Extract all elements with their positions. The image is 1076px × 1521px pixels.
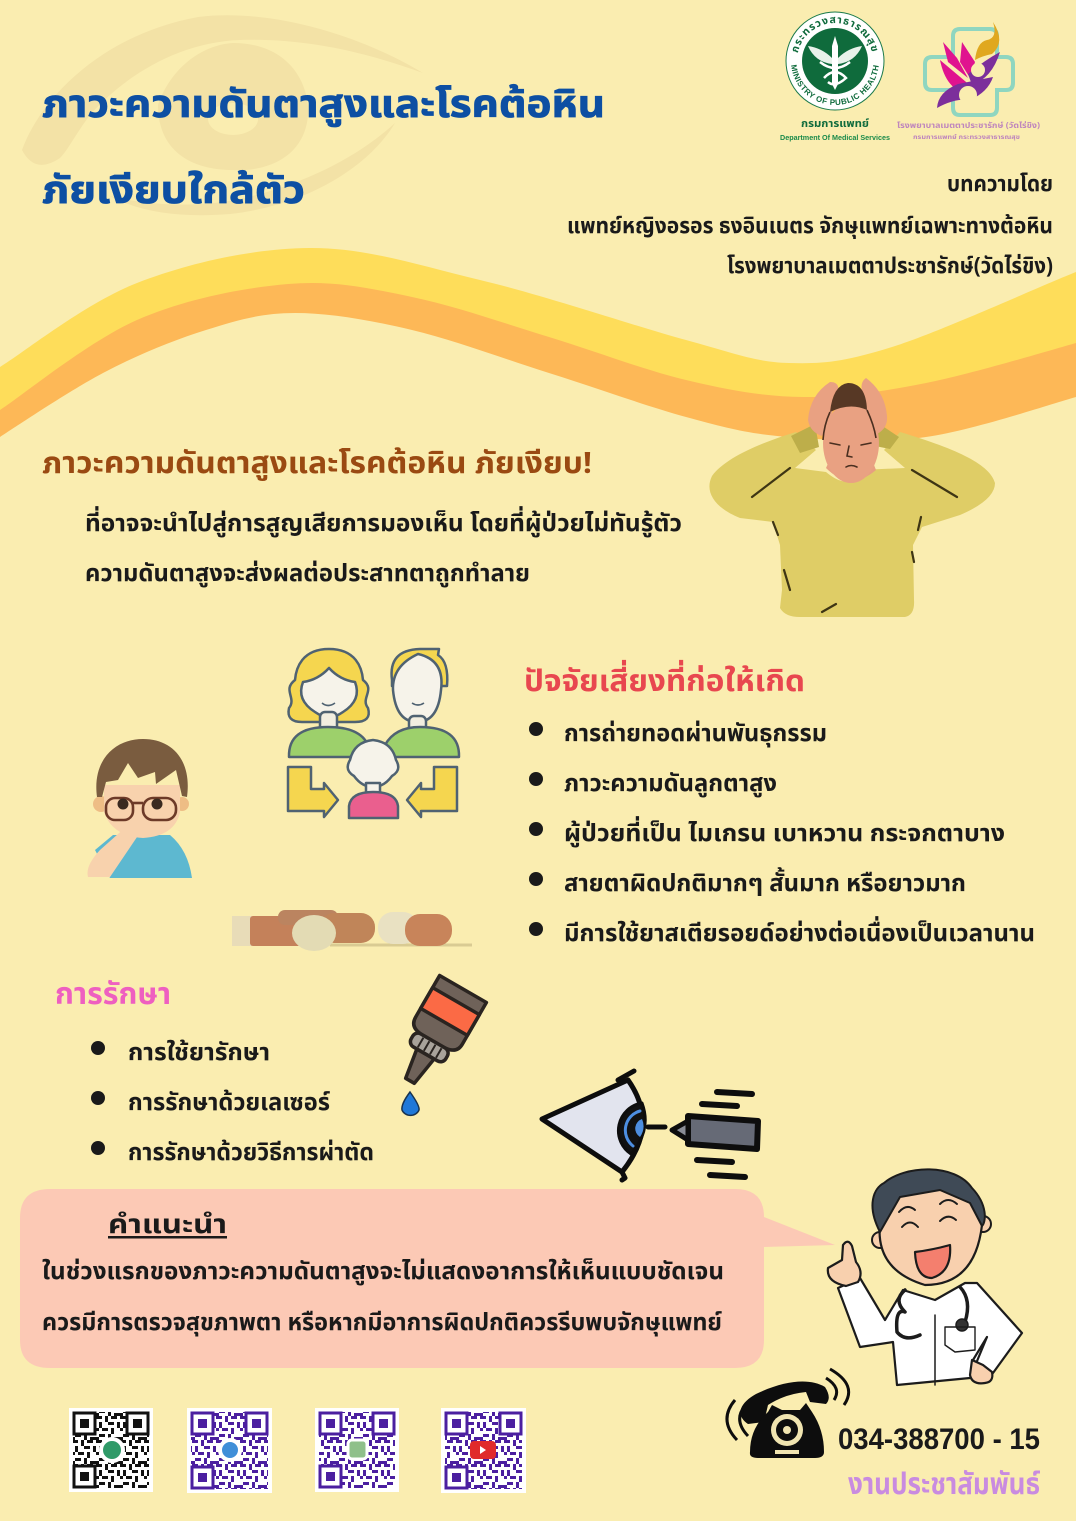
- risk factor list: [529, 716, 1035, 952]
- author credit: บทความโดย: [947, 168, 1053, 201]
- callout: advice: ในช่วงแรกของภาวะความดันตาสูงจะไม่แสดงอาการให้เห็นแบบชัดเจน: [42, 1254, 724, 1290]
- title: ภาวะความดันตาสูงและโรคต้อหิน: [42, 78, 605, 135]
- treatment list: การรักษาด้วยวิธีการผ่าตัด: [128, 1135, 374, 1171]
- QR code: LINE: [315, 1408, 399, 1492]
- logo: Ministry of Public Health: กรมการแพทย์: [801, 116, 869, 132]
- wave: orange band: [0, 283, 1076, 441]
- section heading: silent threat: ภาวะความดันตาสูงและโรคต้อหิน ภัยเงียบ!: [42, 441, 592, 487]
- intro text: [85, 506, 682, 592]
- heading: risk factors: ปัจจัยเสี่ยงที่ก่อให้เกิด: [524, 659, 805, 705]
- logo: Metta Pracharak hospital: โรงพยาบาลเมตตาประชารักษ์ (วัดไร่ขิง): [897, 119, 1040, 132]
- eye watermark background: [22, 15, 423, 215]
- illustration: doctor: [828, 1169, 1022, 1385]
- treatment list: การรักษาด้วยเลเซอร์: [128, 1085, 330, 1121]
- icon: child rubbing eyes: [88, 739, 192, 878]
- illustration: man with headache: [709, 378, 995, 617]
- risk factor list: ภาวะความดันลูกตาสูง: [564, 766, 777, 802]
- heading: treatment: การรักษา: [55, 972, 171, 1018]
- icon: telephone: [727, 1369, 849, 1458]
- QR code: YouTube: [441, 1408, 526, 1493]
- risk factor list: การถ่ายทอดผ่านพันธุกรรม: [564, 716, 827, 752]
- risk factor list: มีการใช้ยาสเตียรอยด์อย่างต่อเนื่องเป็นเวลานาน: [564, 916, 1035, 952]
- icon: family genetics: [288, 649, 459, 818]
- wave: yellow band: [0, 248, 1076, 423]
- image: capsules: [232, 910, 472, 951]
- risk factor list: สายตาผิดปกติมากๆ สั้นมาก หรือยาวมาก: [564, 866, 966, 902]
- phone number: 034-388700 - 15: [838, 1423, 1040, 1456]
- callout: advice: คำแนะนำ: [108, 1205, 227, 1246]
- callout: advice: ควรมีการตรวจสุขภาพตา หรือหากมีอาการผิดปกติควรรีบพบจักษุแพทย์: [42, 1305, 722, 1341]
- QR code: website: [69, 1408, 153, 1492]
- author credit: แพทย์หญิงอรอร ธงอินเนตร จักษุแพทย์เฉพาะทางต้อหิน: [567, 210, 1053, 243]
- callout: advice: [20, 1189, 835, 1368]
- logo: Ministry of Public Health: Department Of Medical Services: [780, 135, 890, 142]
- risk factor list: ผู้ป่วยที่เป็น ไมเกรน เบาหวาน กระจกตาบาง: [564, 816, 1005, 852]
- logo: Ministry of Public Health: กระทรวงสาธารณสุข: [792, 16, 878, 53]
- logo: Ministry of Public Health: MINISTRY OF PUBLIC HEALTH: [791, 64, 879, 105]
- QR code: Facebook: [187, 1408, 272, 1493]
- author credit: โรงพยาบาลเมตตาประชารักษ์(วัดไร่ขิง): [727, 250, 1053, 283]
- intro text: ความดันตาสูงจะส่งผลต่อประสาทตาถูกทำลาย: [85, 556, 530, 592]
- logo: Metta Pracharak hospital: กรมการแพทย์ กระทรวงสาธารณสุข: [913, 132, 1020, 142]
- logo: Metta Pracharak hospital: [897, 22, 1040, 142]
- icon: laser eye treatment: [542, 1071, 758, 1180]
- title: [42, 78, 605, 221]
- public relations label: งานประชาสัมพันธ์: [848, 1462, 1040, 1508]
- intro text: ที่อาจจะนำไปสู่การสูญเสียการมองเห็น โดยที่ผู้ป่วยไม่ทันรู้ตัว: [85, 506, 682, 542]
- icon: eye drop bottle: [387, 976, 486, 1115]
- treatment list: การใช้ยารักษา: [128, 1035, 270, 1071]
- author credit: [567, 168, 1053, 283]
- logo: Ministry of Public Health: [780, 12, 890, 142]
- title: ภัยเงียบใกล้ตัว: [42, 164, 305, 221]
- treatment list: [91, 1035, 374, 1171]
